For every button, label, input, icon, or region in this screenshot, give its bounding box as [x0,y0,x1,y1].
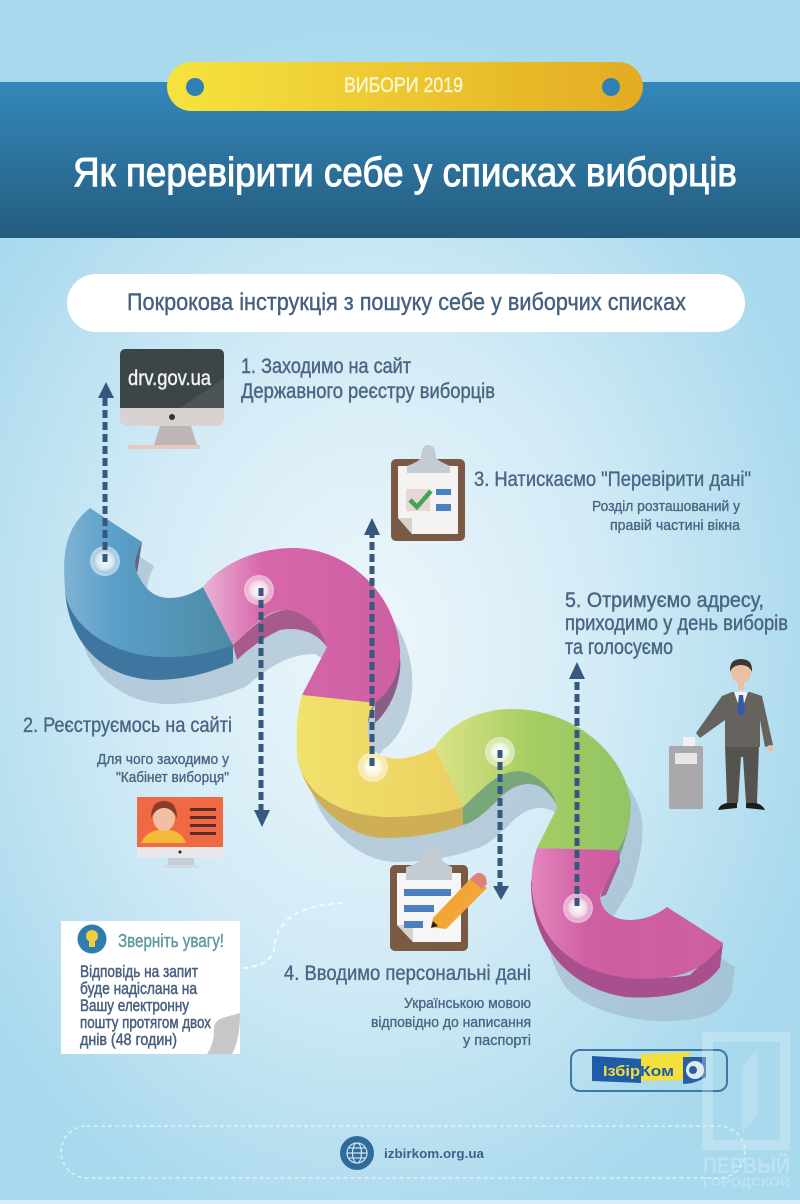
note: attention: буде надіслана на [80,980,198,998]
icon: clipboard with checkmark [391,445,465,541]
icon: clipboard with pencil [390,848,487,951]
icon: monitor drv.gov.ua: drv.gov.ua [128,367,211,390]
step 2 text: Для чого заходимо у [97,751,229,768]
note: attention: Відповідь на запит [80,963,198,981]
glowing dot markers [90,546,593,923]
green segment [435,709,630,860]
blue segment [64,508,233,680]
icon: globe [340,1136,374,1170]
pill: ВИБОРИ 2019: ВИБОРИ 2019 [344,74,463,97]
header band [0,82,800,238]
step 4 text: відповідно до написання [371,1014,531,1031]
step 2 text [23,714,232,786]
watermark: ГОРОДСКОЙ [703,1174,790,1189]
arrow 3 [364,518,380,766]
footer dashed pill [61,1126,745,1178]
arrow 5 [569,662,585,906]
icon: monitor drv.gov.ua [120,349,224,449]
arrow 2 [254,588,270,827]
pink segment [203,548,400,723]
step 1 text [241,355,495,403]
step 5 text: 5. Отримуємо адресу, [565,589,764,612]
logo: ІзбірКом [571,1050,727,1091]
magenta segment [531,848,723,998]
arrow 4 [493,750,509,900]
ribbon [64,508,735,1021]
arrow 1 [98,382,114,562]
step 2 text: "Кабінет виборця" [116,769,229,786]
step 4 text: Українською мовою [404,995,531,1012]
step 1 text: 1. Заходимо на сайт [241,355,411,378]
footer dashed pill: izbirkom.org.ua [384,1146,485,1161]
step 3 text: правій частині вікна [610,517,741,534]
note: attention: Зверніть увагу! [118,931,224,951]
icon: light bulb [78,924,106,954]
subtitle pill [67,274,745,332]
step 5 text: та голосуємо [565,636,673,659]
note: attention [61,921,240,1054]
step 3 text: Розділ розташований у [592,498,740,515]
step 2 text: 2. Реєструємось на сайті [23,714,232,737]
note: attention: Вашу електронну [80,997,190,1015]
pill: ВИБОРИ 2019 [167,62,643,111]
note: attention: днів (48 годин) [80,1031,177,1049]
step 3 text: 3. Натискаємо "Перевірити дані" [474,468,751,491]
step 3 text [474,468,751,534]
watermark: ПЕРВЫЙ [703,1153,790,1178]
subtitle pill: Покрокова інструкція з пошуку себе у виборчих списках [127,289,686,316]
watermark [702,1032,790,1189]
step 4 text: 4. Вводимо персональні дані [284,962,531,985]
yellow segment [297,695,463,838]
title: Як перевірити себе у списках виборців [73,149,737,195]
step 4 text: у паспорті [463,1032,531,1049]
note: attention: пошту протягом двох [80,1014,212,1032]
icon: voter at ballot box [669,659,773,810]
step 4 text [284,962,531,1049]
ribbon shadow [76,532,735,1021]
step 1 text: Державного реєстру виборців [241,380,495,403]
logo: ІзбірКом: Ком [640,1063,674,1080]
icon: monitor with profile [137,797,223,868]
step 5 text [565,589,788,659]
logo: ІзбірКом: Ізбір [603,1063,640,1080]
